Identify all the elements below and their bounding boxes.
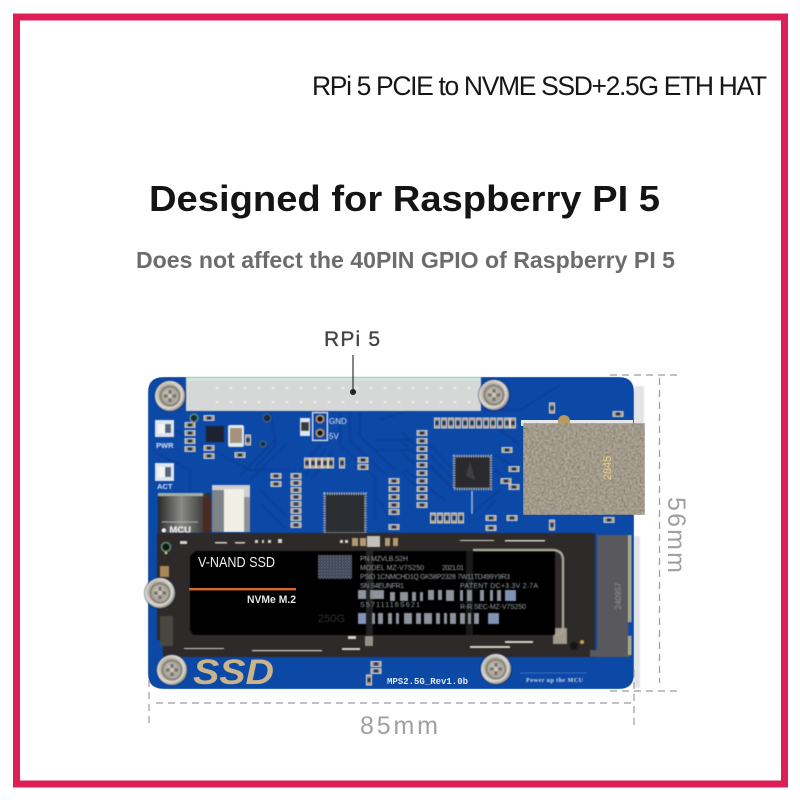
RJ45 Ethernet jack: 2845 xyxy=(602,456,614,480)
board text: power note xyxy=(520,673,587,684)
GPIO header xyxy=(186,377,481,411)
SSD label data xyxy=(318,551,538,635)
SSD label data: SN S4EUNFR1 xyxy=(360,583,404,590)
PCB traces xyxy=(160,385,560,530)
power pins: GND and 5V: GND xyxy=(329,417,347,426)
SSD edge parts xyxy=(160,542,584,650)
width label: 85mm xyxy=(360,712,438,740)
SSD black label xyxy=(190,551,555,635)
subheading: Does not affect the 40PIN GPIO of Raspberry PI 5 xyxy=(136,247,675,273)
board text: SSD: SSD xyxy=(193,653,274,692)
product name: RPi 5 PCIE to NVME SSD+2.5G ETH HAT xyxy=(312,71,767,101)
LED: PWR xyxy=(155,420,174,450)
chip: Ethernet controller xyxy=(454,456,491,514)
callout: RPi 5 label: RPi 5 xyxy=(324,328,380,351)
MCU connector block xyxy=(158,493,211,536)
M.2 connector xyxy=(590,535,632,657)
FPC connector xyxy=(212,485,250,532)
SSD label brand: V-NAND SSD xyxy=(198,554,275,571)
power pins: GND and 5V xyxy=(300,412,347,441)
LED: PWR: PWR xyxy=(156,441,174,450)
M.2 connector: 240957 xyxy=(614,582,623,609)
SSD label type: NVMe M.2 xyxy=(247,594,296,606)
board text: revision: MPS2.5G_Rev1.0b xyxy=(387,677,468,687)
SSD label data: 2021.01 xyxy=(442,565,464,572)
mounting screws xyxy=(144,379,512,686)
arrow: RPi 5 pointer xyxy=(350,355,356,395)
SSD label data: PN MZVLB.S2H xyxy=(360,556,408,563)
chip: PCIe controller xyxy=(324,494,366,534)
stand-offs behind board xyxy=(634,386,644,688)
SSD label highlight edge xyxy=(473,550,563,635)
orange stripe xyxy=(189,588,296,590)
LED: ACT: ACT xyxy=(157,482,173,491)
SSD label data: PATENT DC+3.3V 2.7A xyxy=(460,583,538,590)
SSD small components xyxy=(180,536,545,651)
surface mount components xyxy=(184,402,624,686)
SSD label data: R-R SEC-MZ-V7S250 xyxy=(460,604,526,611)
PCB xyxy=(148,377,634,689)
board text: power note: Power up the MCU xyxy=(526,678,584,684)
SSD label data: 250G xyxy=(318,613,345,625)
SSD label data: PSID 1CNMCHD1Q GK58P2328 7W11TD499Y9R3 xyxy=(360,574,510,581)
power pins: GND and 5V: 5V xyxy=(329,432,339,441)
main heading: Designed for Raspberry PI 5 xyxy=(149,178,660,219)
LED: ACT xyxy=(155,463,174,491)
SSD label data: MODEL MZ-V7S250 xyxy=(360,565,424,572)
NVMe SSD xyxy=(157,533,632,657)
RJ45 Ethernet jack xyxy=(521,415,645,515)
height label: 56mm xyxy=(662,497,690,573)
MCU connector block: ● MCU xyxy=(161,525,191,536)
SSD label data: S5711116S621 xyxy=(360,602,420,609)
board illustration xyxy=(144,355,645,692)
